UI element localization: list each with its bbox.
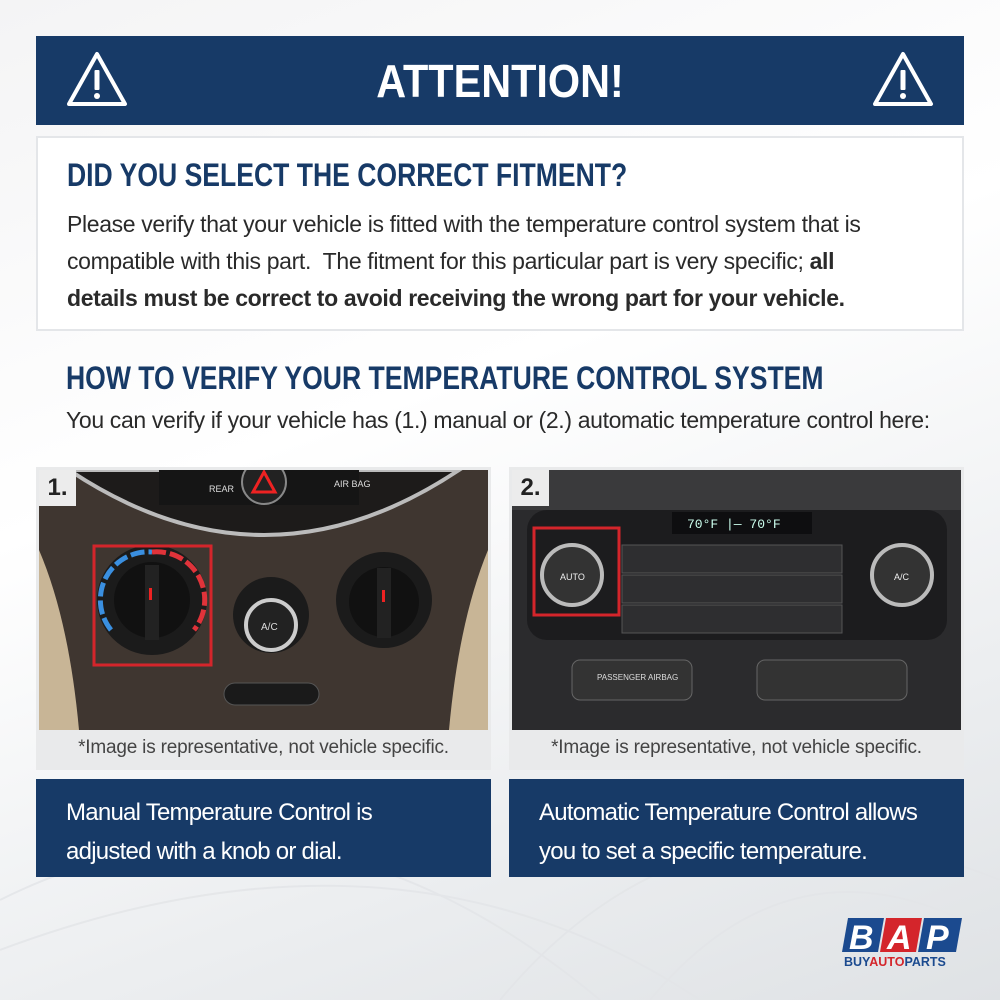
logo: BAP: P: [926, 919, 949, 957]
title: ATTENTION!: [376, 55, 624, 107]
image: automatic dash: 70°F |— 70°F: [687, 517, 781, 532]
callout: manual: adjusted with a knob or dial.: [66, 838, 342, 865]
callout: automatic: [509, 779, 964, 877]
text: fitment body: Please verify that your vehicle is fitted with the temperature control system that is compatible with this part. The fitment for this particular part is very specific; all details must be correct to avoid receiving the wrong part for your vehicle.: [67, 211, 861, 311]
heading: verify: HOW TO VERIFY YOUR TEMPERATURE CONTROL SYSTEM: [66, 360, 824, 396]
image: automatic dash: A/C: [894, 572, 910, 582]
icon: warning left: [67, 52, 128, 106]
icon: warning right: [873, 52, 934, 106]
panel: manual image: [36, 467, 491, 770]
badge: 1.: [39, 470, 76, 506]
callout: automatic: you to set a specific temperature.: [539, 838, 867, 865]
logo: BAP: A: [886, 919, 912, 957]
image: manual dash: AIR BAG: [334, 479, 371, 489]
badge: 1.: 1.: [47, 474, 68, 501]
caption: automatic: *Image is representative, not vehicle specific.: [551, 737, 922, 758]
image: manual dash: [39, 470, 488, 730]
image: automatic dash: AUTO: [560, 572, 585, 582]
badge: 2.: 2.: [520, 474, 540, 501]
text: verify intro: You can verify if your vehicle has (1.) manual or (2.) automatic temperature control here:: [66, 407, 930, 433]
panel: fitment: [36, 136, 964, 331]
callout: automatic: Automatic Temperature Control allows: [539, 799, 917, 826]
badge: 2.: [512, 470, 549, 506]
heading: fitment: DID YOU SELECT THE CORRECT FITMENT?: [67, 157, 627, 193]
logo: BAP: [842, 918, 962, 968]
caption: manual: *Image is representative, not vehicle specific.: [78, 737, 449, 758]
image: manual dash: A/C: [261, 622, 278, 633]
image: automatic dash: PASSENGER AIRBAG: [597, 673, 678, 682]
header bar: [36, 36, 964, 125]
image: automatic dash: [512, 470, 961, 730]
callout: manual: [36, 779, 491, 877]
logo: BAP: B: [849, 919, 874, 957]
panel: automatic image: [509, 467, 964, 770]
image: manual dash: REAR: [209, 484, 235, 494]
callout: manual: Manual Temperature Control is: [66, 799, 372, 826]
